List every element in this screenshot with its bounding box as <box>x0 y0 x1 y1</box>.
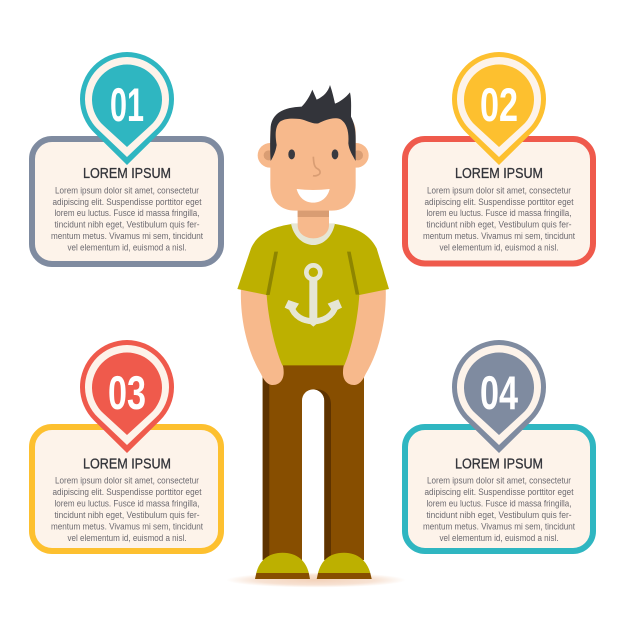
panel 1 body text: mentum metus. Vivamus mi sem, tincidunt <box>51 231 203 241</box>
panel 3 <box>32 340 221 551</box>
panel 2 body text <box>423 185 575 252</box>
panel 2 body text: Lorem ipsum dolor sit amet, consectetur <box>427 185 571 195</box>
panel 4 body text: Lorem ipsum dolor sit amet, consectetur <box>427 476 571 486</box>
panel 2 body text: lorem eu luctus. Fusce id massa fringilla, <box>426 208 572 218</box>
panel 4 body text: adipiscing elit. Suspendisse porttitor eget <box>424 487 574 497</box>
panel 4 pin <box>452 340 546 453</box>
panel 1 pin: 01 <box>110 78 144 131</box>
right ear <box>344 143 369 168</box>
panel 2 pin: 02 <box>480 78 518 131</box>
panel 4 body text: tincidunt nibh eget, Vestibulum quis fer- <box>426 510 572 520</box>
sleeve fold right <box>347 252 359 295</box>
panel 3 body text: adipiscing elit. Suspendisse porttitor eget <box>52 487 202 497</box>
panel 3 body text: mentum metus. Vivamus mi sem, tincidunt <box>51 521 203 531</box>
panel 1 <box>32 52 221 264</box>
panel 3 body text: vel elementum id, euismod a nisl. <box>68 533 186 543</box>
hair <box>270 85 356 161</box>
panel 3 body text: lorem eu luctus. Fusce id massa fringilla, <box>54 498 200 508</box>
panel 4 card <box>405 427 593 551</box>
ground shadow <box>226 572 406 588</box>
panel 3 card <box>32 427 221 551</box>
panel 2 pin <box>452 52 546 165</box>
panel 2 body text: mentum metus. Vivamus mi sem, tincidunt <box>423 231 575 241</box>
panel 3 body text: tincidunt nibh eget, Vestibulum quis fer- <box>54 510 200 520</box>
panel 1 pin <box>80 52 174 165</box>
panel 4 heading: LOREM IPSUM <box>455 456 543 472</box>
panel 4 body text: lorem eu luctus. Fusce id massa fringilla, <box>426 498 572 508</box>
left shoe <box>255 553 310 579</box>
panel 2 body text: vel elementum id, euismod a nisl. <box>440 242 558 252</box>
panel 3 pin: 03 <box>108 366 146 419</box>
head and neck <box>258 85 369 245</box>
panel 3 heading: LOREM IPSUM <box>83 456 171 472</box>
arms <box>241 287 386 385</box>
panel 1 body text: tincidunt nibh eget, Vestibulum quis fer- <box>54 220 200 230</box>
face <box>270 108 356 211</box>
panel 1 body text: adipiscing elit. Suspendisse porttitor eget <box>52 197 202 207</box>
panel 1 body text: vel elementum id, euismod a nisl. <box>68 242 186 252</box>
right shoe <box>317 553 372 579</box>
panel 3 pin <box>80 340 174 453</box>
smile <box>297 189 330 203</box>
neck <box>298 208 329 238</box>
panel 1 body text: lorem eu luctus. Fusce id massa fringilla, <box>54 208 200 218</box>
trousers <box>263 364 364 560</box>
panel 2 body text: tincidunt nibh eget, Vestibulum quis fer- <box>426 220 572 230</box>
panel 1 card <box>32 139 221 264</box>
collar <box>291 223 335 245</box>
left ear <box>258 143 282 168</box>
panel 2 heading: LOREM IPSUM <box>455 166 543 182</box>
left eye <box>288 149 295 159</box>
panel 4 body text: vel elementum id, euismod a nisl. <box>440 533 558 543</box>
anchor emblem <box>285 265 342 327</box>
shirt <box>237 224 389 365</box>
panel 3 body text <box>51 476 203 543</box>
panel 3 body text: Lorem ipsum dolor sit amet, consectetur <box>55 476 199 486</box>
panel 1 body text: Lorem ipsum dolor sit amet, consectetur <box>55 185 199 195</box>
panel 4 body text: mentum metus. Vivamus mi sem, tincidunt <box>423 521 575 531</box>
panel 1 body text <box>51 185 203 252</box>
sleeve fold left <box>266 252 278 295</box>
panel 4 <box>405 340 593 551</box>
panel 1 heading: LOREM IPSUM <box>83 166 171 182</box>
right eye <box>332 149 338 159</box>
panel 4 pin: 04 <box>480 366 518 419</box>
panel 2 body text: adipiscing elit. Suspendisse porttitor eget <box>424 197 574 207</box>
panel 2 card <box>405 139 593 264</box>
nose <box>313 157 320 176</box>
panel 2 <box>405 52 593 263</box>
character figure <box>226 85 406 587</box>
neck shadow <box>298 208 329 217</box>
panel 4 body text <box>423 476 575 543</box>
